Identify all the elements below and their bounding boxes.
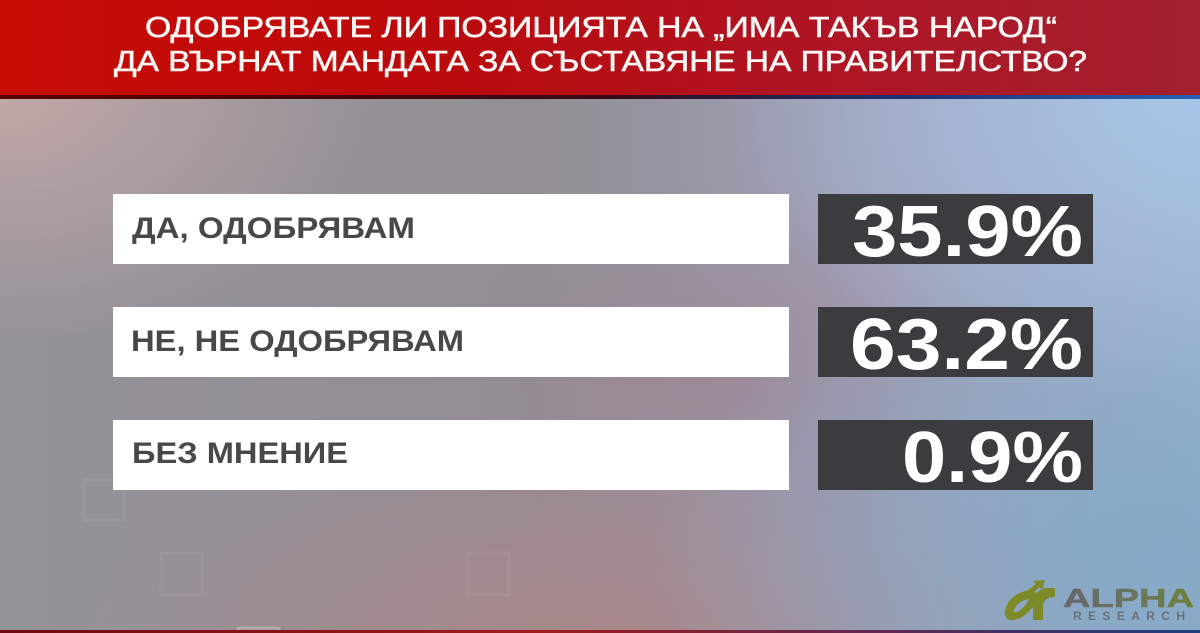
answer bar: yes: ДА, ОДОБРЯВАМ bbox=[132, 212, 415, 245]
logo: Alpha Research bbox=[1005, 580, 1194, 623]
answer bar: no bbox=[113, 307, 789, 377]
title: ДА ВЪРНАТ МАНДАТА ЗА СЪСТАВЯНЕ НА ПРАВИТЕЛСТВО? bbox=[114, 46, 1087, 78]
icon: logo mark bbox=[1005, 580, 1055, 620]
header band bbox=[0, 0, 1200, 99]
logo subtitle: RESEARCH bbox=[1073, 609, 1185, 623]
title: ОДОБРЯВАТЕ ЛИ ПОЗИЦИЯТА НА „ИМА ТАКЪВ НАРОД“ bbox=[145, 12, 1057, 44]
row: yes bbox=[113, 192, 1093, 272]
value: no opinion bbox=[818, 418, 1093, 498]
answer bar: yes bbox=[113, 194, 789, 264]
answer bar: no: НЕ, НЕ ОДОБРЯВАМ bbox=[131, 325, 464, 358]
decorative squares bbox=[84, 480, 509, 633]
answer bar: no opinion: БЕЗ МНЕНИЕ bbox=[132, 437, 348, 470]
footer strip bbox=[0, 630, 1200, 633]
answer bar: no opinion bbox=[113, 420, 789, 490]
logo wordmark: ALPHA bbox=[1063, 583, 1194, 613]
row: no bbox=[113, 305, 1093, 385]
title bbox=[114, 12, 1087, 78]
value: no: 63.2% bbox=[850, 305, 1083, 385]
row: no opinion bbox=[113, 418, 1093, 498]
value: no opinion: 0.9% bbox=[902, 418, 1083, 498]
value: yes: 35.9% bbox=[852, 192, 1083, 272]
